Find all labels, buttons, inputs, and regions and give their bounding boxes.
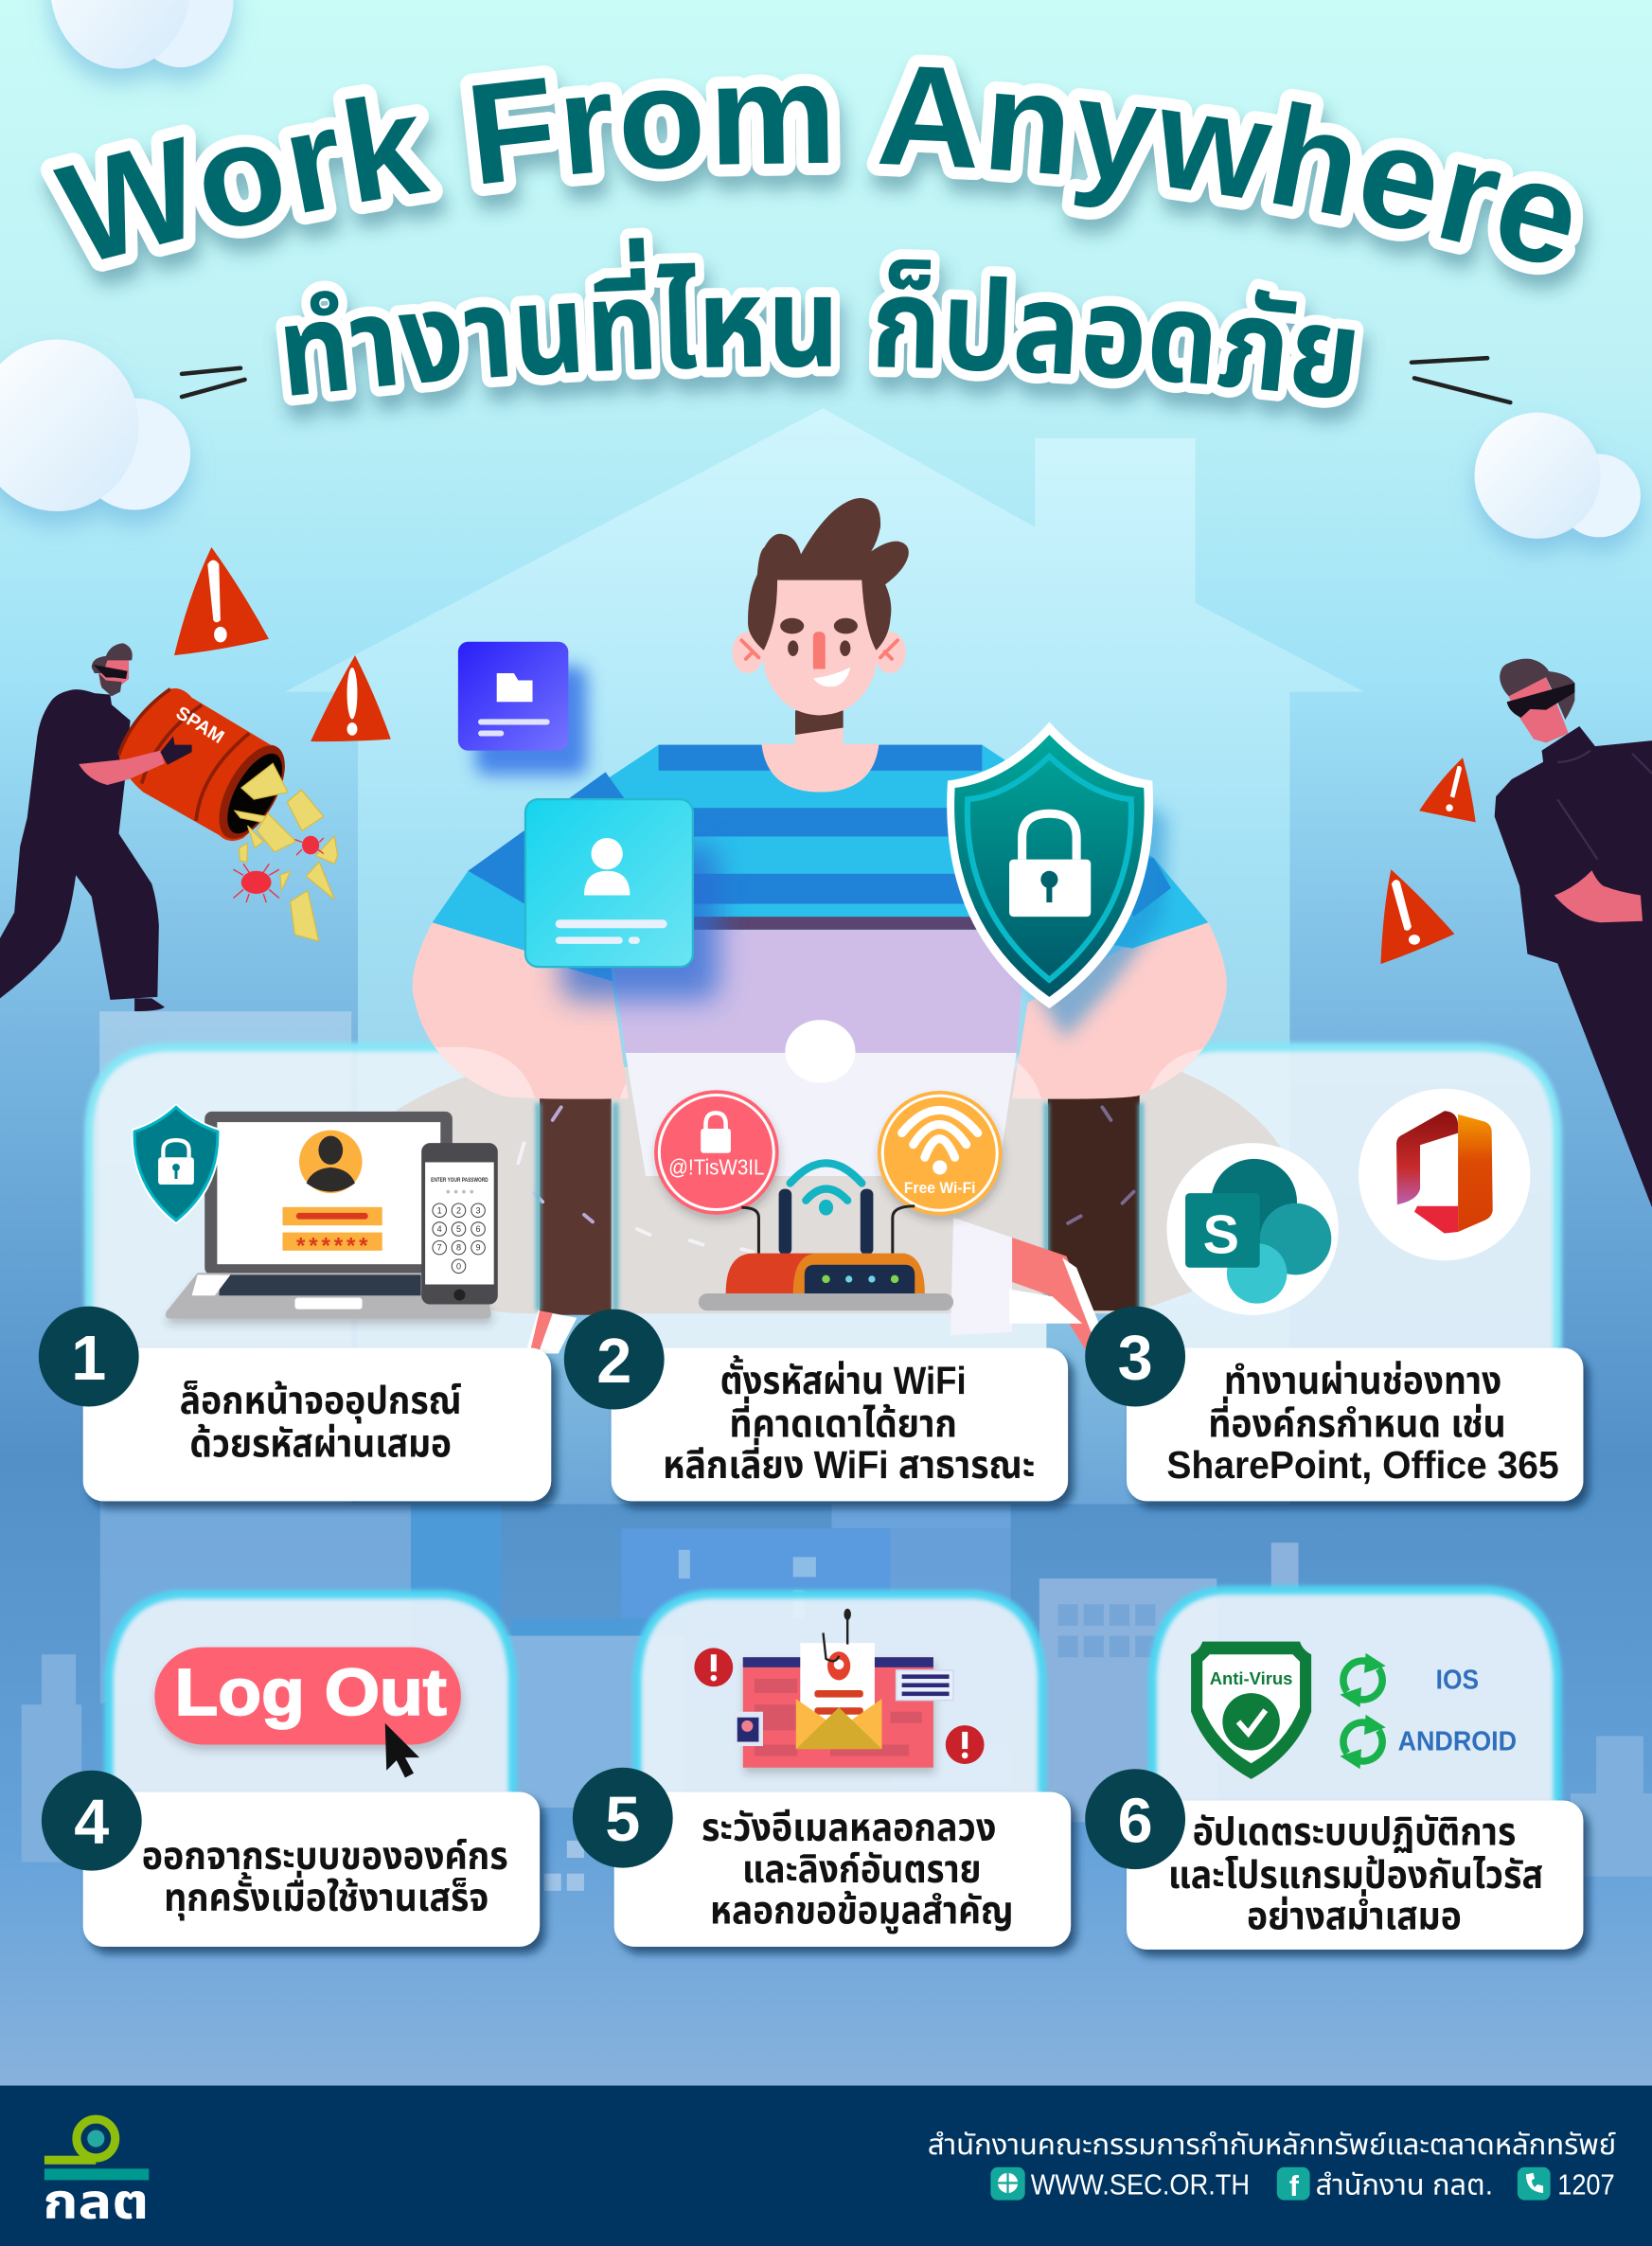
face [1508,677,1569,743]
hacker left with spam barrel [0,643,338,1011]
neck shadow [795,710,844,735]
cursor [385,1723,419,1777]
hacker right [1495,659,1652,1207]
facebook icon: f [1289,2171,1300,2202]
coat creases [1557,751,1652,860]
card text: SharePoint, Office 365 [1166,1443,1559,1487]
illustration: office worker [413,498,1227,1354]
subtitle: Thai: ทำงานที่ไหน ก็ปลอดภัย [284,238,1355,398]
password badge: @!TisW3IL [668,1154,764,1179]
warning 3 [1419,758,1476,822]
email window [743,1657,933,1768]
foot [134,998,165,1011]
envelope [796,1699,881,1749]
card text: และลิงก์อันตราย [742,1847,982,1891]
card text: ทุกครั้งเมื่อใช้งานเสร็จ [164,1870,488,1921]
badge 1 [39,1307,139,1407]
wifi signal [790,1163,862,1201]
panel frames [89,1047,1557,1816]
website: WWW.SEC.OR.TH [1031,2170,1250,2201]
user card [525,799,719,1000]
SEC logo: กลต [43,2174,149,2229]
arm and hand [79,751,165,785]
frame 3 [1143,1047,1557,1378]
card box [614,1791,1071,1947]
barrel label: SPAM [172,703,227,748]
frame 5 [637,1595,1042,1808]
person tile [733,1712,763,1746]
log out button [154,1648,461,1745]
card text: ออกจากระบบขององค์กร [142,1834,508,1878]
security shield [947,722,1166,1039]
face [761,580,876,715]
lap [609,930,1026,1053]
card text: ที่คาดเดาได้ยาก [729,1396,957,1445]
sharepoint icon [1166,1143,1339,1315]
step 3 card [1127,1348,1583,1501]
panel highlights over arms [435,1047,1202,1098]
web icon [990,2167,1025,2201]
cloud: right [1474,413,1641,539]
warning 4 [1380,869,1454,964]
footer band [0,2086,1652,2246]
card box [1127,1348,1583,1501]
step 5 card [614,1791,1071,1947]
phone: 7 [437,1243,442,1253]
accent marks [182,358,1510,402]
antivirus shield [1191,1642,1311,1779]
hotline: 1207 [1557,2170,1615,2201]
card box [83,1791,540,1947]
hair [1500,659,1574,720]
hand [1554,870,1643,922]
badge 5 [573,1768,673,1868]
clouds [0,0,1641,539]
card text: หลอกขอข้อมูลสำคัญ [710,1889,1014,1934]
badge 2 [564,1310,665,1410]
facebook icon [1277,2167,1310,2202]
avatar [299,1131,363,1193]
organisation name: สำนักงานคณะกรรมการกำกับหลักทรัพย์และตลาดหลักทรัพย์ [928,2130,1616,2161]
arm left [413,922,629,1099]
card text: ล็อกหน้าจออุปกรณ์ [180,1379,462,1424]
phone: 9 [476,1243,481,1253]
step 1 card [83,1348,551,1501]
laptop lower white part [626,1053,1017,1176]
card text: อย่างสม่ำเสมอ [1247,1889,1462,1938]
folder card [458,642,587,775]
warning 2 [311,655,391,741]
SEC logo [43,2119,149,2229]
small shield [132,1103,221,1224]
card text: หลีกเลี่ยง WiFi สาธารณะ [663,1437,1035,1487]
card text: ที่องค์กรกำหนด เช่น [1208,1396,1506,1445]
free wifi badge: Free Wi-Fi [904,1179,976,1197]
background skyline [22,1011,1652,1891]
title: Work From Anywhere: Work From Anywhere [36,55,1598,299]
cloud: top left [50,0,233,69]
free wifi badge [878,1091,1002,1216]
laptop [166,1112,491,1318]
facebook name: สำนักงาน กลต. [1316,2170,1493,2201]
step 4 card [83,1791,540,1947]
neck and collar [761,723,879,793]
frame 2 [615,1047,1046,1378]
nose [813,632,826,668]
arm right [1012,922,1227,1099]
badge 4 [42,1771,142,1871]
badge 3: 3 [1118,1324,1153,1394]
cloud: left [0,340,190,511]
frame 1 [89,1047,540,1378]
sharepoint icon: S [1203,1205,1239,1266]
panel 1: lock screen [132,1103,498,1318]
panel edge shading [539,1103,1141,1310]
phone: 4 [437,1224,442,1234]
password fields: ****** [296,1234,368,1259]
phone: 5 [456,1224,461,1234]
warning triangles [174,547,1476,964]
card text: ด้วยรหัสผ่านเสมอ [189,1421,452,1465]
phone: ENTER YOUR PASSWORD [431,1177,488,1184]
card text: ระวังอีเมลหลอกลวง [702,1806,996,1849]
panel 2: wifi password [654,1090,1002,1310]
badge 6: 6 [1118,1786,1153,1856]
laptop logo [785,1020,855,1083]
barrel [119,688,298,849]
warning 1 [174,547,269,655]
phone: 2 [456,1205,461,1215]
card box [1127,1801,1583,1950]
panel 3: sharepoint and office [1166,1089,1530,1315]
phone icon [1518,2167,1551,2201]
sync icon top [1340,1653,1386,1707]
shoes [525,1218,1110,1354]
eyes and brows [780,618,858,656]
panel 4: log out [154,1648,461,1777]
step 6 card [1127,1801,1583,1950]
badge 5: 5 [605,1785,640,1855]
subtitle: Thai: ทำงานที่ไหน ก็ปลอดภัย [271,227,1377,432]
router [699,1189,953,1310]
paper with hook [800,1609,875,1726]
chair gray shape [397,1067,1280,1313]
frame 6 [1152,1590,1557,1816]
badge 1: 1 [71,1324,106,1394]
label IOS: IOS [1436,1666,1479,1696]
card text: อัปเดตระบบปฏิบัติการ [1193,1809,1516,1853]
goggles [1507,683,1574,718]
phone: 8 [456,1243,461,1253]
log out label: Log Out [174,1655,447,1729]
legs [518,1089,1140,1315]
body [0,689,159,1000]
spilled envelopes [235,763,338,941]
card text: ตั้งรหัสผ่าน WiFi [720,1354,967,1402]
number badges [39,1307,1185,1871]
ears [732,632,906,673]
office icon [1359,1089,1530,1260]
panel 5: phishing [694,1609,985,1768]
glove [160,737,192,765]
password badge [654,1090,779,1215]
card text: ทำงานผ่านช่องทาง [1224,1359,1501,1402]
bugs [233,836,324,902]
card text: และโปรแกรมป้องกันไวรัส [1168,1853,1543,1897]
alert right [946,1725,985,1764]
badge 4: 4 [74,1788,109,1858]
panel 6: updates [1191,1642,1517,1779]
coat and leg [1495,726,1652,1207]
phone: 0 [456,1261,461,1271]
phone: 3 [476,1205,481,1215]
shirt [433,745,1208,981]
wifi dot [819,1200,833,1216]
title: Work From Anywhere: Work From Anywhere [53,66,1572,263]
card box [612,1348,1068,1501]
badge 6 [1085,1769,1185,1869]
smile [813,668,850,686]
sync icon bottom [1340,1715,1386,1769]
label ANDROID: ANDROID [1398,1727,1517,1757]
antivirus shield: Anti-Virus [1210,1669,1292,1688]
phone: 6 [476,1224,481,1234]
badge 2: 2 [596,1327,631,1397]
head [92,643,133,696]
hair [748,498,909,651]
phone [421,1143,498,1305]
house silhouette [285,408,1364,1504]
alert left [694,1648,733,1686]
card box [83,1348,551,1501]
password fields [282,1207,382,1259]
badge 3 [1085,1307,1185,1407]
phone: 1 [437,1205,442,1215]
step 2 card [612,1348,1068,1501]
floating list [897,1670,953,1701]
frame 4 [109,1595,512,1808]
